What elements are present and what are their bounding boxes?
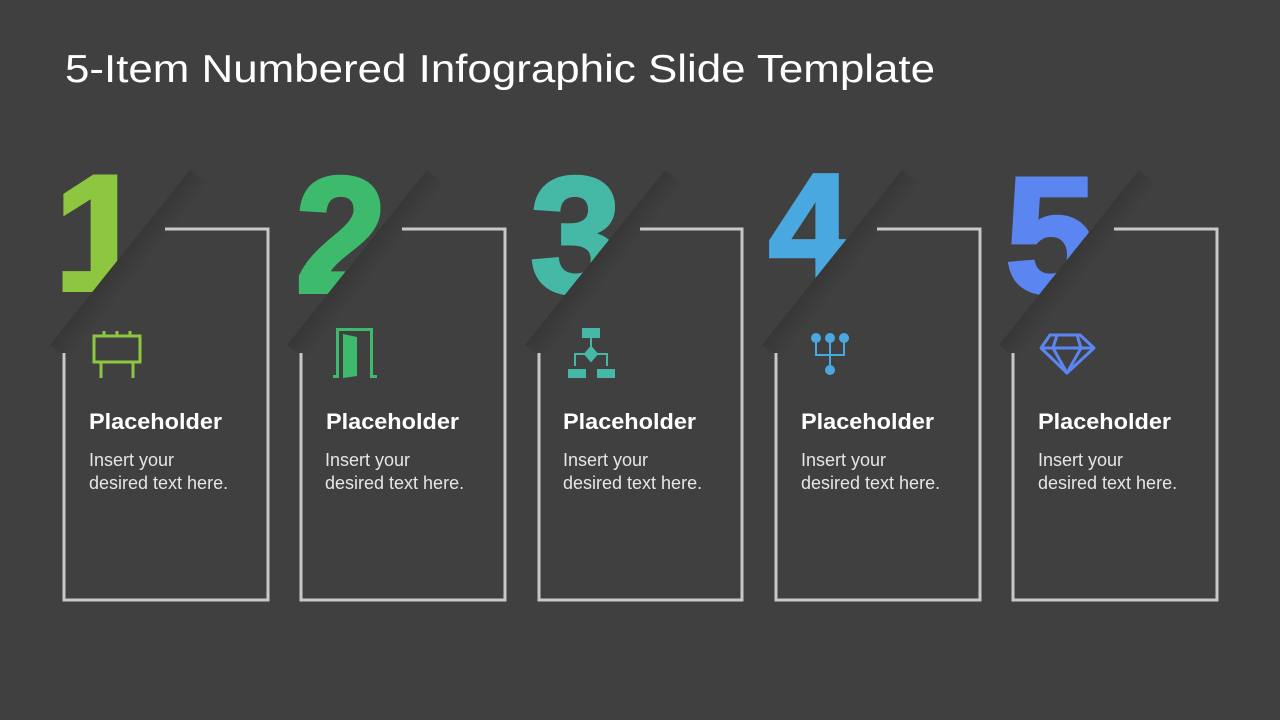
number shadow (50, 170, 215, 365)
heading: Placeholder (326, 409, 459, 434)
body text: Insert your (563, 450, 648, 470)
icon: flowchart (569, 329, 614, 377)
heading: Placeholder (563, 409, 696, 434)
number shadow (287, 170, 452, 365)
heading: Placeholder (89, 409, 222, 434)
number shadow (762, 170, 927, 365)
body text: Insert your (1038, 450, 1123, 470)
box outline (1013, 229, 1217, 600)
box outline (539, 229, 742, 600)
body text: desired text here. (801, 473, 940, 493)
number 2: 2 (295, 143, 387, 327)
icon: door (333, 328, 377, 378)
number shadow (999, 170, 1164, 365)
icon: billboard (94, 331, 140, 378)
item 3 (525, 143, 742, 600)
icon: hierarchy (812, 334, 848, 374)
icon: diamond (1041, 335, 1094, 373)
title: 5-Item Numbered Infographic Slide Template (65, 48, 935, 91)
body text: desired text here. (325, 473, 464, 493)
box outline (64, 229, 268, 600)
box outline (776, 229, 980, 600)
number 4: 4 (769, 144, 851, 309)
heading: Placeholder (1038, 409, 1171, 434)
body text: desired text here. (89, 473, 228, 493)
body text: desired text here. (1038, 473, 1177, 493)
box outline (301, 229, 505, 600)
body text: Insert your (801, 450, 886, 470)
number 5: 5 (1005, 143, 1097, 327)
item 4 (762, 144, 980, 600)
number 3: 3 (530, 143, 622, 327)
item 2 (287, 143, 505, 600)
item 1 (50, 141, 268, 600)
body text: Insert your (89, 450, 174, 470)
number shadow (525, 170, 690, 365)
number 1: 1 (54, 141, 146, 325)
body text: desired text here. (563, 473, 702, 493)
body text: Insert your (325, 450, 410, 470)
heading: Placeholder (801, 409, 934, 434)
item 5 (999, 143, 1217, 600)
